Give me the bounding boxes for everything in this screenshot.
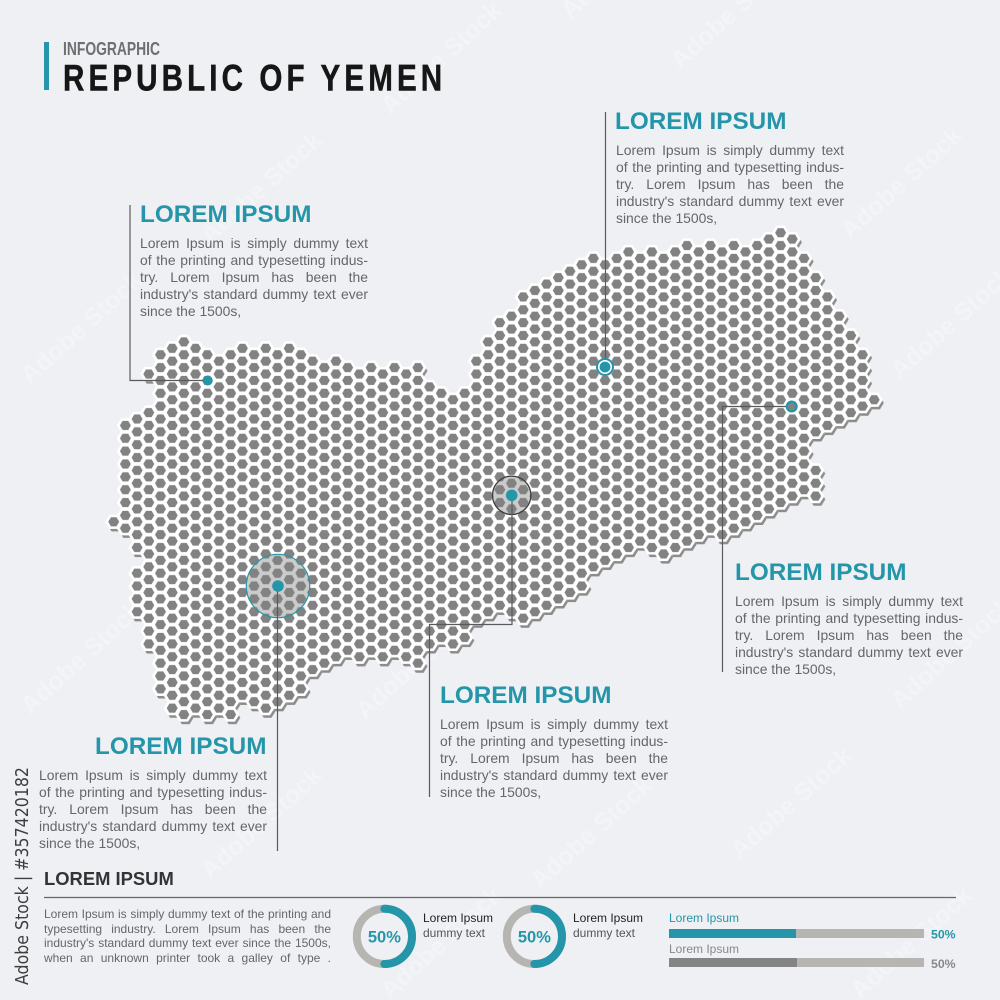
bottom divider: [44, 896, 956, 898]
donut chart 1: 50%: [368, 928, 401, 946]
text block: east: [735, 559, 963, 677]
title: republic of yemen: REPUBLIC OF YEMEN: [63, 58, 442, 99]
marker: east ring with leader line: [722, 402, 796, 672]
text block: central: of the printing and typesetting indus-: [440, 733, 668, 749]
bottom body text: industry's standard dummy text ever since the 1500s,: [44, 936, 331, 950]
title accent bar: [44, 42, 49, 90]
donut chart 2: 50%: [518, 928, 551, 946]
text block: north: of the printing and typesetting indus-: [616, 159, 844, 175]
credit: vertical stock label: Adobe Stock | #357420182: [12, 767, 33, 985]
text block: north: try. Lorem Ipsum has been the: [616, 176, 844, 192]
text: Adobe Stock: [725, 741, 858, 864]
text: Adobe Stock: [15, 596, 148, 719]
bar chart: Lorem Ipsum: [669, 942, 739, 956]
text block: east: Lorem Ipsum is simply dummy text: [735, 593, 963, 609]
text block: central: LOREM IPSUM: [440, 682, 611, 709]
donut 2 label: dummy text: [573, 926, 635, 940]
text: Adobe Stock: [195, 761, 328, 884]
text: Adobe Stock: [525, 771, 658, 894]
title: infographic label: INFOGRAPHIC: [63, 39, 160, 59]
text block: north-west: Lorem Ipsum is simply dummy text: [140, 235, 368, 251]
text block: central: Lorem Ipsum is simply dummy text: [440, 716, 668, 732]
donut 1 label: Lorem Ipsum: [423, 911, 493, 925]
text: Adobe Stock: [835, 121, 968, 244]
text block: central: since the 1500s,: [440, 784, 541, 800]
text block: south-west: industry's standard dummy text ever: [39, 818, 267, 834]
text block: south-west: try. Lorem Ipsum has been the: [39, 801, 267, 817]
marker: north-west dot with leader line: [130, 205, 213, 386]
donut 1 label: [423, 911, 493, 940]
donut chart 1: [357, 909, 412, 964]
text block: east: industry's standard dummy text ever: [735, 644, 963, 660]
bar chart: 50%: [931, 957, 956, 971]
text block: north: since the 1500s,: [616, 210, 717, 226]
text block: north: LOREM IPSUM: [615, 108, 786, 135]
text block: east: try. Lorem Ipsum has been the: [735, 627, 963, 643]
donut 1 label: dummy text: [423, 926, 485, 940]
bottom body text: Lorem Ipsum is simply dummy text of the printing and: [44, 907, 331, 921]
text block: east: since the 1500s,: [735, 661, 836, 677]
text block: south-west: LOREM IPSUM: [95, 733, 266, 760]
donut 2 label: Lorem Ipsum: [573, 911, 643, 925]
marker: north ring with leader line: [597, 112, 613, 375]
text: Adobe Stock: [195, 126, 328, 249]
text block: central: [440, 682, 668, 800]
marker: south-west circle with leader line: [246, 554, 310, 851]
text block: north-west: industry's standard dummy text ever: [140, 286, 368, 302]
bottom body text: [44, 907, 331, 965]
text block: north: Lorem Ipsum is simply dummy text: [616, 142, 844, 158]
text block: south-west: [39, 733, 267, 851]
text block: central: industry's standard dummy text ever: [440, 767, 668, 783]
text block: east: of the printing and typesetting indus-: [735, 610, 963, 626]
text block: north-west: of the printing and typesetting indus-: [140, 252, 368, 268]
text block: north-west: LOREM IPSUM: [140, 201, 311, 228]
text: Adobe Stock: [375, 0, 508, 119]
text block: north-west: since the 1500s,: [140, 303, 241, 319]
text block: south-west: of the printing and typesetting indus-: [39, 784, 267, 800]
bar chart: [669, 911, 956, 971]
marker: central circle with leader line: [430, 476, 531, 797]
donut 2 label: [573, 911, 643, 940]
text: Adobe Stock: [350, 601, 483, 724]
bottom heading: LOREM IPSUM: [44, 868, 174, 889]
text block: south-west: since the 1500s,: [39, 835, 140, 851]
text block: north: [615, 108, 844, 226]
bar chart: Lorem Ipsum: [669, 911, 739, 925]
text: Adobe Stock: [15, 266, 148, 389]
donut chart 2: [507, 909, 562, 964]
bottom body text: typesetting industry. Lorem Ipsum has been the: [44, 922, 331, 936]
text block: north: industry's standard dummy text ever: [616, 193, 844, 209]
text block: south-west: Lorem Ipsum is simply dummy text: [39, 767, 267, 783]
text block: central: try. Lorem Ipsum has been the: [440, 750, 668, 766]
map: hexagon dot map of Yemen: [105, 226, 885, 724]
text block: north-west: try. Lorem Ipsum has been the: [140, 269, 368, 285]
text block: east: LOREM IPSUM: [735, 559, 906, 586]
bottom body text: when an unknown printer took a galley of type .: [44, 951, 331, 965]
bar chart: 50%: [931, 928, 956, 942]
text block: north-west: [140, 201, 368, 319]
